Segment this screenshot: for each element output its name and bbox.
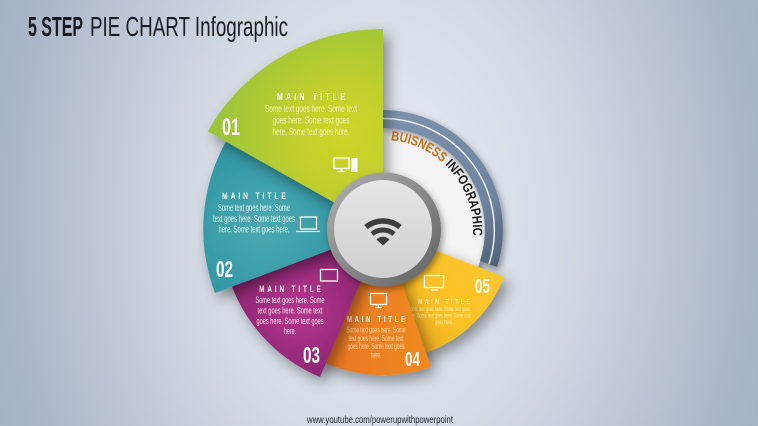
step 01 text: Some text goes here. Some text — [265, 104, 357, 115]
ring highlight line — [383, 118, 494, 264]
step 04 title: MAIN TITLE — [347, 314, 405, 324]
step 04 text: text goes here. Some text — [348, 334, 404, 343]
step 03 text: here. — [284, 326, 296, 336]
step 05 text: here. Some text goes here. Some text — [408, 312, 471, 320]
step 02 title: MAIN TITLE — [222, 191, 286, 201]
panel: step 03 purple — [228, 230, 383, 377]
white disc — [281, 128, 485, 332]
step 01 text: here. Some text goes here. — [272, 127, 350, 138]
panel: step 01 green — [208, 29, 383, 230]
number 05: 05 — [475, 276, 490, 298]
title: PIE CHART Infographic — [90, 11, 288, 42]
step 02 text: here. Some text goes here. — [218, 224, 290, 236]
green segment — [208, 29, 383, 230]
yellow segment — [383, 230, 504, 356]
panel: step 02 teal — [203, 130, 383, 293]
step 01 text — [265, 104, 357, 138]
hub face — [334, 180, 432, 278]
icon: monitor — [370, 294, 386, 308]
step 05 title: MAIN TITLE — [418, 299, 470, 306]
icon: wifi — [366, 221, 400, 246]
orange segment — [313, 230, 431, 375]
icon: monitor — [320, 270, 338, 281]
title: 5 STEP — [28, 11, 83, 42]
step 02 text — [213, 203, 295, 236]
footer url: www.youtube.com/powerupwithpowerpoint — [306, 415, 453, 426]
panel: business infographic disc — [383, 109, 509, 273]
step 04 text: here. — [371, 350, 381, 360]
number 02: 02 — [216, 256, 233, 282]
step 03 text: Some text goes here. Some — [256, 295, 324, 305]
step 03 text: text goes here. Some text — [258, 306, 323, 316]
central hub — [327, 172, 441, 286]
hub bezel — [327, 172, 441, 286]
step 05 text: goes here. — [435, 319, 453, 326]
panel: step 05 yellow — [383, 230, 504, 356]
number 04: 04 — [405, 349, 421, 371]
step 04 text — [346, 326, 406, 360]
icon: monitor — [424, 276, 444, 290]
teal segment — [203, 130, 383, 293]
purple segment — [228, 230, 383, 377]
number 03: 03 — [303, 342, 320, 368]
number 01: 01 — [222, 114, 240, 141]
title — [28, 11, 288, 42]
blue outer ring — [383, 110, 503, 267]
step 03 text — [256, 295, 324, 336]
step 01 text: goes here. Some text goes — [272, 116, 350, 126]
step 03 text: goes here. Some text goes — [256, 316, 324, 326]
step 02 text: text goes here. Some text goes — [213, 214, 295, 225]
step 01 title: MAIN TITLE — [277, 91, 345, 102]
curved label: BUISNESS INFOGRAPHIC — [392, 131, 482, 236]
step 05 text: Some text goes here. Some text goes — [408, 306, 470, 313]
step 03 title: MAIN TITLE — [259, 284, 321, 294]
step 04 text: Some text goes here. Some — [346, 326, 406, 334]
panel: step 04 orange — [313, 230, 431, 375]
step 04 text: goes here. Some text goes — [348, 342, 404, 351]
step 05 text — [408, 306, 471, 326]
step 02 text: Some text goes here. Some — [218, 203, 290, 214]
icon: desktop computer — [334, 158, 358, 172]
icon: laptop — [296, 217, 320, 232]
